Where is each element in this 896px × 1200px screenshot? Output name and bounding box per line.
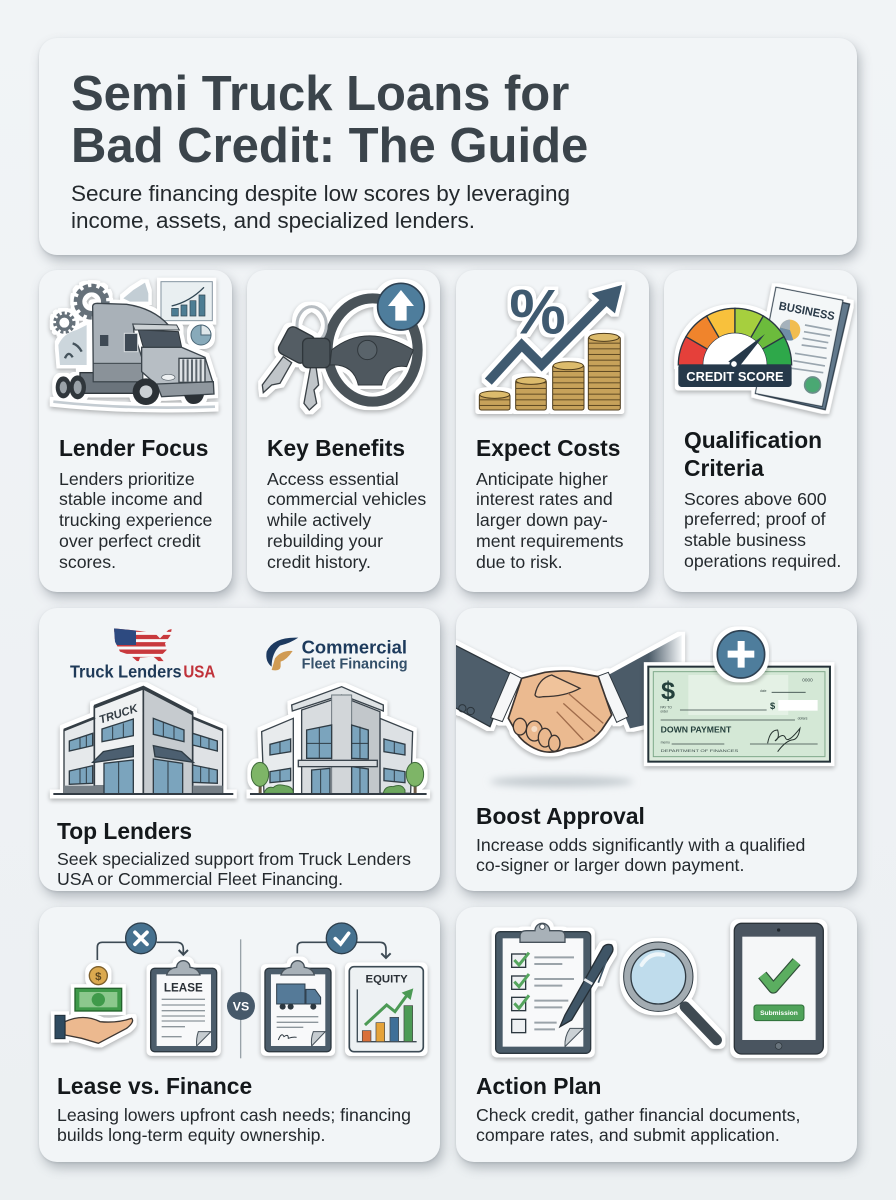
icon: percent, rising arrow and coin stacks: % [509, 277, 566, 347]
icon: percent, rising arrow and coin stacks [472, 277, 628, 418]
icon: truck lenders building: TRUCK [98, 703, 140, 727]
text [684, 489, 841, 571]
logo: truck lenders usa [47, 628, 432, 803]
text: Seek specialized support from Truck Lenders [57, 849, 411, 869]
heading [684, 427, 822, 481]
icon: handshake and down payment check: $ [661, 677, 675, 705]
logo: truck lenders usa: Truck Lenders [70, 662, 182, 682]
heading: Action Plan [476, 1073, 601, 1099]
text: Lenders prioritize [59, 469, 195, 489]
icon: handshake and down payment check [456, 626, 837, 790]
text: builds long-term equity ownership. [57, 1125, 325, 1145]
text [59, 469, 212, 572]
text: due to risk. [476, 552, 563, 572]
logo: truck lenders usa: Fleet Financing [302, 656, 408, 672]
text: co-signer or larger down payment. [476, 855, 744, 875]
panel: action plan [456, 907, 857, 1162]
icon: lease vs finance comparison: EQUITY [366, 974, 408, 986]
icon: handshake and down payment check: date [760, 689, 767, 693]
text: operations required. [684, 551, 841, 571]
icon: lease vs finance comparison [48, 922, 430, 1060]
icon: credit score gauge and business document: BUSINESS [778, 300, 836, 323]
icon: checklist, magnifier and tablet [489, 918, 830, 1063]
heading: Lender Focus [59, 435, 208, 461]
heading: Criteria [684, 455, 764, 481]
panel: top lenders [39, 608, 440, 891]
icon: keys, steering wheel and up arrow [256, 278, 431, 419]
icon: handshake and down payment check: dollars [798, 717, 808, 721]
text: Check credit, gather financial documents, [476, 1105, 800, 1125]
icon: credit score gauge and business document [672, 283, 856, 418]
text: scores. [59, 552, 116, 572]
heading: Qualification [684, 427, 822, 453]
panel: key benefits [247, 270, 440, 592]
text: Access essential [267, 469, 399, 489]
panel: qualification criteria [664, 270, 857, 592]
text: larger down pay- [476, 510, 608, 530]
icon: checklist, magnifier and tablet: Submission [760, 1010, 798, 1017]
heading: Key Benefits [267, 435, 405, 461]
text: compare rates, and submit application. [476, 1125, 780, 1145]
panel: boost approval [456, 608, 857, 891]
text: USA or Commercial Fleet Financing. [57, 869, 343, 889]
icon: commercial fleet financing building [250, 687, 427, 794]
text: Leasing lowers upfront cash needs; financing [57, 1105, 411, 1125]
text [476, 1105, 800, 1145]
logo: truck lenders usa: USA [183, 662, 216, 682]
text: Scores above 600 [684, 489, 827, 509]
text: ment requirements [476, 531, 623, 551]
icon: truck lenders building [53, 688, 233, 794]
text: stable business [684, 530, 806, 550]
icon: lease vs finance comparison: $ [95, 971, 102, 983]
icon: lease vs finance comparison: VS [233, 999, 249, 1013]
heading: Lease vs. Finance [57, 1073, 252, 1099]
text: commercial vehicles [267, 489, 426, 509]
icon: handshake and down payment check: order [660, 710, 669, 714]
text: over perfect credit [59, 531, 201, 551]
text [57, 1105, 411, 1145]
text: interest rates and [476, 489, 613, 509]
text [476, 469, 623, 572]
text [267, 469, 426, 572]
icon: handshake and down payment check: 0000 [802, 678, 813, 683]
subtitle [71, 181, 570, 233]
panel: header [39, 38, 857, 255]
icon: lease vs finance comparison: LEASE [164, 982, 203, 995]
icon: handshake and down payment check: $ [770, 701, 776, 711]
icon: handshake and down payment check: DEPARTMENT OF FINANCES [661, 748, 739, 753]
panel: lender focus [39, 270, 232, 592]
text: rebuilding your [267, 531, 383, 551]
icon: handshake and down payment check: DOWN PAYMENT [661, 725, 731, 734]
logo: truck lenders usa: Commercial [302, 636, 407, 657]
text: credit history. [267, 552, 371, 572]
title [71, 67, 588, 173]
subtitle: income, assets, and specialized lenders. [71, 208, 475, 233]
icon: handshake and down payment check: memo [661, 741, 670, 745]
text: Increase odds significantly with a qualified [476, 835, 805, 855]
text: preferred; proof of [684, 509, 826, 529]
subtitle: Secure financing despite low scores by leveraging [71, 181, 570, 206]
title: Semi Truck Loans for [71, 67, 569, 121]
text: stable income and [59, 489, 203, 509]
icon: credit score gauge and business document: CREDIT SCORE [686, 369, 784, 384]
text [57, 849, 411, 889]
text: while actively [267, 510, 371, 530]
text: Anticipate higher [476, 469, 608, 489]
heading: Top Lenders [57, 818, 192, 844]
heading: Expect Costs [476, 435, 620, 461]
icon: semi truck with gears and charts [47, 277, 221, 417]
text [476, 835, 805, 875]
panel: expect costs [456, 270, 649, 592]
icon: handshake and down payment check: PAY TO [660, 705, 672, 709]
panel: lease vs finance [39, 907, 440, 1162]
heading: Boost Approval [476, 803, 645, 829]
title: Bad Credit: The Guide [71, 119, 588, 173]
text: trucking experience [59, 510, 212, 530]
